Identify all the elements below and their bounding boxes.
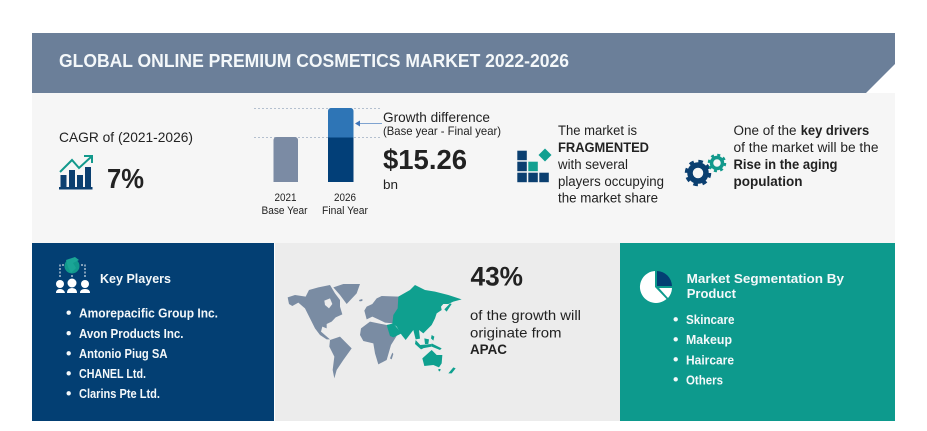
key players list: CHANEL Ltd. xyxy=(79,367,146,381)
text block: growth difference: (Base year - Final year) xyxy=(383,124,501,138)
icon: growth chart xyxy=(59,156,92,190)
growth share text: of the growth will xyxy=(470,307,581,323)
CAGR label: CAGR of (2021-2026) xyxy=(59,129,193,145)
CAGR value: 7% xyxy=(107,163,144,194)
panel: market segmentation xyxy=(620,243,895,421)
growth share text: APAC xyxy=(470,342,507,357)
panel: key drivers xyxy=(686,123,878,189)
key players list: Antonio Piug SA xyxy=(79,347,168,361)
icon: global players xyxy=(56,257,90,293)
header banner xyxy=(32,33,895,93)
bar: 2021 base year xyxy=(274,137,298,182)
key players list: Avon Products Inc. xyxy=(79,327,184,341)
text block: growth difference: Growth difference xyxy=(383,109,490,125)
bar: 2026 final year xyxy=(328,108,354,182)
key players list xyxy=(66,307,218,401)
key drivers text: One of the xyxy=(734,123,796,138)
label: 2021: 2021 xyxy=(274,192,296,204)
segmentation list xyxy=(674,313,735,388)
key players heading: Key Players xyxy=(100,271,171,286)
key drivers text: key drivers xyxy=(801,123,869,138)
segmentation list: Makeup xyxy=(686,333,732,347)
key players list: Clarins Pte Ltd. xyxy=(79,387,160,401)
key drivers text: population xyxy=(734,174,802,189)
segmentation heading: Market Segmentation By xyxy=(687,271,845,286)
fragmentation text: players occupying xyxy=(558,174,664,189)
label: 2026: 2026 xyxy=(334,192,356,204)
growth share text xyxy=(470,307,581,357)
text block: growth difference: $15.26 xyxy=(383,144,467,175)
panel: key players xyxy=(32,243,274,421)
growth share text: originate from xyxy=(470,324,562,340)
fragmentation text: FRAGMENTED xyxy=(558,140,649,155)
fragmentation text xyxy=(557,123,664,206)
world map xyxy=(288,284,462,378)
fragmentation text: with several xyxy=(557,157,628,172)
segmentation heading: Product xyxy=(687,286,737,301)
segmentation list: Skincare xyxy=(686,313,735,327)
segmentation heading xyxy=(687,271,845,301)
icon: pie chart xyxy=(640,271,672,303)
icon: gears xyxy=(686,155,725,184)
fragmentation text: the market share xyxy=(558,190,658,206)
icon: fragmented blocks xyxy=(517,148,552,182)
label: final year: Final Year xyxy=(322,205,368,217)
panel: CAGR xyxy=(59,129,193,194)
key drivers text: Rise in the aging xyxy=(734,157,838,172)
fragmentation text: The market is xyxy=(558,123,637,138)
segmentation list: Haircare xyxy=(686,354,734,368)
panel: growth bar chart xyxy=(254,108,382,217)
arrow: growth pointer xyxy=(355,120,382,126)
text block: growth difference: bn xyxy=(383,177,398,192)
title: GLOBAL ONLINE PREMIUM COSMETICS MARKET 2022-2026 xyxy=(59,51,569,71)
key drivers text xyxy=(734,123,878,189)
key players list: Amorepacific Group Inc. xyxy=(79,307,218,321)
growth share value: 43% xyxy=(470,262,523,292)
segmentation list: Others xyxy=(686,374,723,388)
key drivers text: of the market will be the xyxy=(734,140,878,155)
text block: growth difference xyxy=(383,109,501,192)
panel: regional growth xyxy=(275,243,620,421)
label: base year: Base Year xyxy=(262,205,308,217)
panel: market fragmentation xyxy=(517,123,664,206)
